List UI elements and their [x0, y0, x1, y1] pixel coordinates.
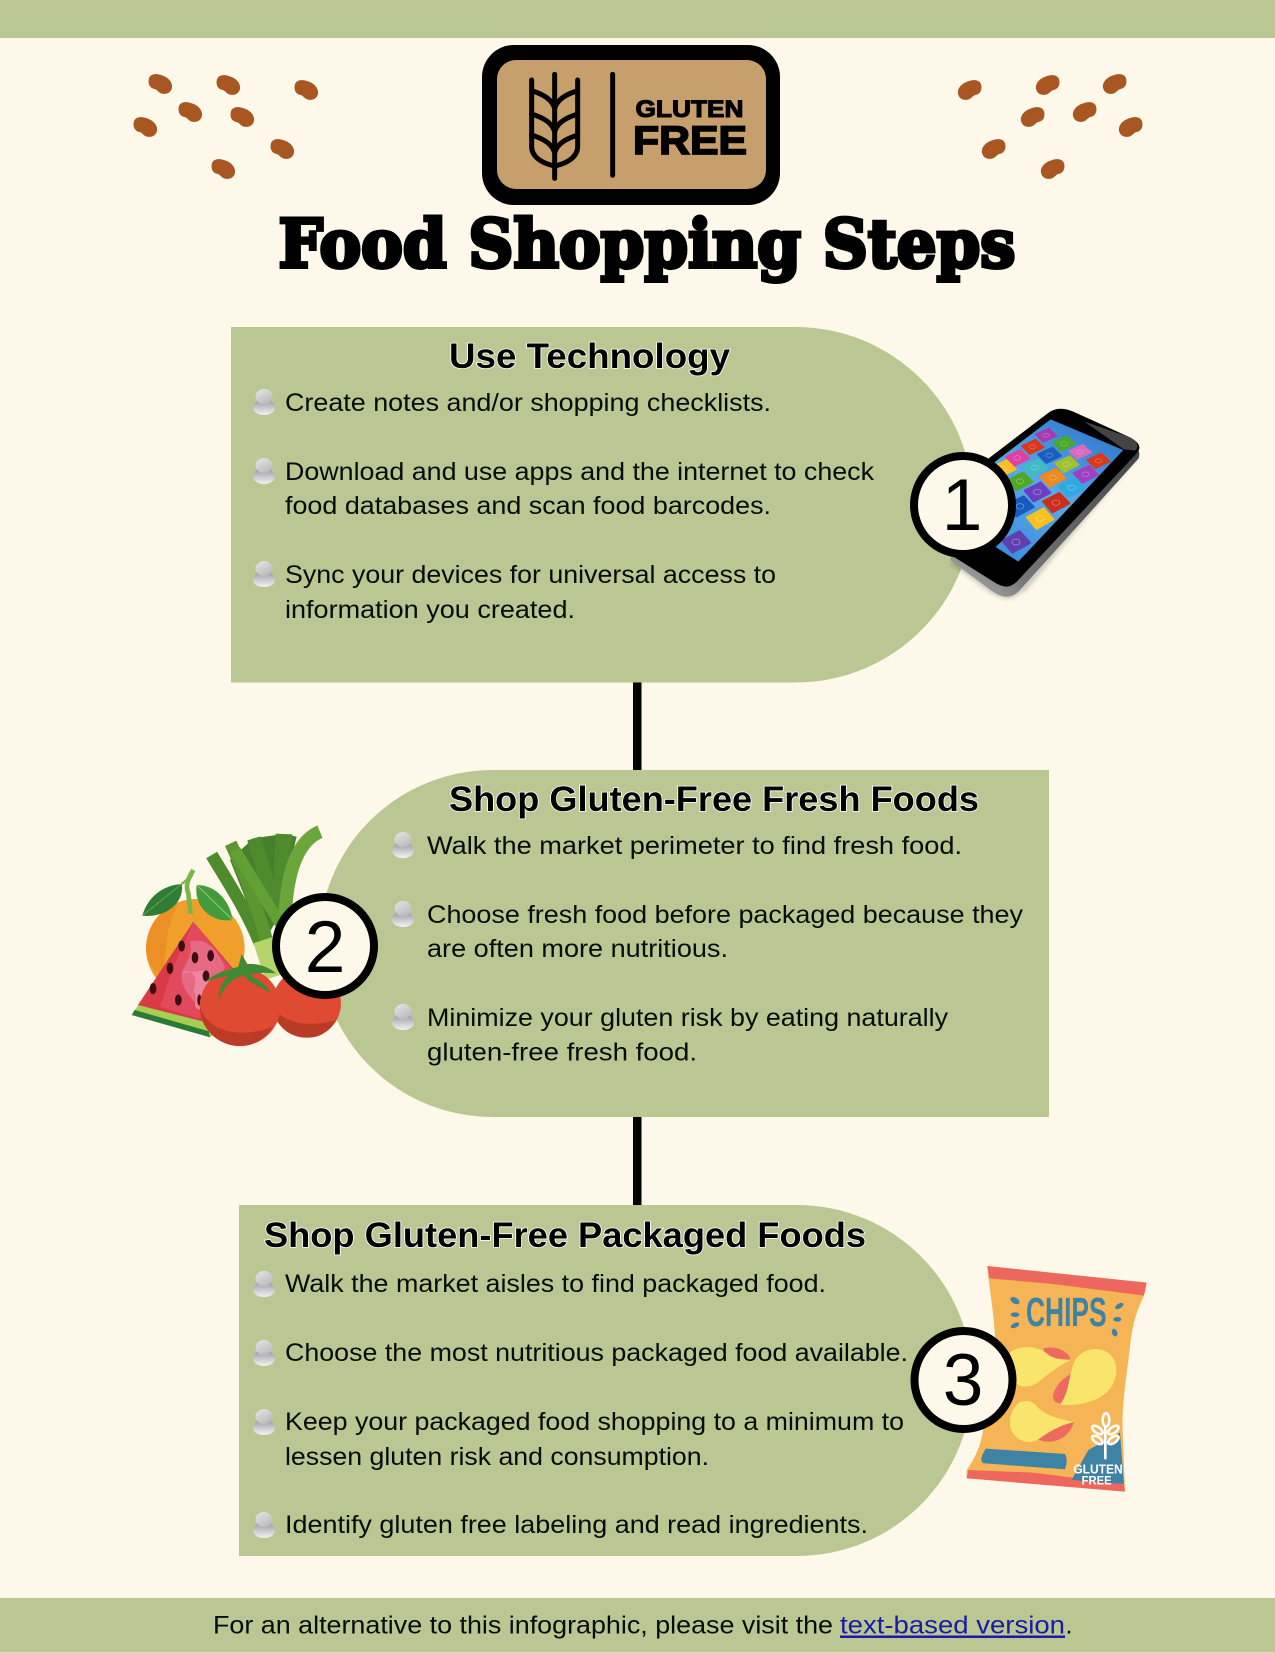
small wheat — [1091, 1413, 1120, 1459]
icon: chips bag — [967, 1266, 1147, 1492]
leaves and stem — [187, 870, 193, 914]
gluten free flag — [1072, 1433, 1124, 1484]
bullet list: Create notes and/or shopping checklists. — [285, 389, 771, 417]
top banner — [0, 0, 1275, 38]
tomato leaves — [205, 954, 276, 1001]
panel: step 3 packaged foods — [239, 1205, 1147, 1556]
bullet list: Walk the market aisles to find packaged food. — [285, 1270, 826, 1298]
connector line 2-3 — [633, 1116, 642, 1206]
bullet list: Choose fresh food before packaged because they — [427, 901, 1024, 929]
bullet list: Walk the market perimeter to find fresh food. — [427, 832, 962, 860]
number badge 3: 3 — [943, 1340, 983, 1421]
title: Food Shopping Steps — [278, 205, 1016, 283]
bullet list: are often more nutritious. — [427, 935, 728, 963]
panel background — [319, 770, 1049, 1117]
bullet list — [253, 389, 875, 624]
large tomato — [200, 967, 280, 1046]
bullet list: Choose the most nutritious packaged food available. — [285, 1339, 908, 1367]
icon: chips bag: GLUTEN — [1073, 1462, 1123, 1476]
number badge 1: 1 — [942, 465, 982, 546]
bullet list: Identify gluten free labeling and read ingredients. — [285, 1511, 868, 1539]
bullet list: Minimize your gluten risk by eating naturally — [427, 1004, 949, 1032]
bullet list — [392, 832, 1024, 1066]
badge text: FREE — [633, 119, 747, 163]
heading: Shop Gluten-Free Packaged Foods — [264, 1216, 866, 1255]
orange — [146, 899, 245, 998]
bullet list: information you created. — [285, 596, 575, 624]
scallions — [230, 834, 297, 943]
label bar — [981, 1449, 1067, 1469]
bullet list: Download and use apps and the internet to check — [285, 458, 875, 486]
number badge 3 — [914, 1331, 1012, 1429]
footer banner — [0, 1598, 1275, 1652]
decorative beans: right cluster — [956, 73, 1145, 180]
icon: chips bag: FREE — [1082, 1474, 1112, 1488]
panel background — [231, 327, 973, 682]
bullet list: lessen gluten risk and consumption. — [285, 1443, 709, 1471]
heading: Shop Gluten-Free Fresh Foods — [449, 780, 979, 819]
footer period: . — [1066, 1612, 1072, 1640]
panel: step 2 fresh foods — [132, 770, 1049, 1117]
bullet list: food databases and scan food barcodes. — [285, 492, 771, 520]
panel: step 1 use technology — [231, 327, 1139, 682]
watermelon — [132, 922, 238, 1037]
number badge 2 — [276, 897, 374, 995]
bullet list: gluten-free fresh food. — [427, 1038, 697, 1066]
footer text: For an alternative to this infographic, please visit the — [213, 1612, 833, 1640]
icon: wheat — [532, 74, 613, 178]
chips — [1043, 1347, 1071, 1360]
icon: fruit and vegetables — [132, 832, 341, 1046]
bullet list: Sync your devices for universal access to — [285, 561, 776, 589]
bullet list — [253, 1270, 908, 1539]
icon: smartphone — [948, 409, 1139, 599]
heading: Use Technology — [449, 337, 731, 376]
number badge 2: 2 — [305, 907, 345, 988]
brand text: CHIPS — [1026, 1289, 1107, 1335]
small tomato — [272, 969, 341, 1038]
bullet list: Keep your packaged food shopping to a minimum to — [285, 1408, 904, 1436]
panel background — [239, 1205, 972, 1556]
footer link: text-based version — [840, 1612, 1065, 1640]
connector line 1-2 — [633, 682, 642, 772]
badge text: GLUTEN — [636, 96, 744, 123]
decorative beans: left cluster — [131, 73, 320, 180]
badge text — [633, 96, 747, 163]
number badge 1 — [914, 456, 1012, 554]
gluten free badge — [482, 45, 780, 205]
